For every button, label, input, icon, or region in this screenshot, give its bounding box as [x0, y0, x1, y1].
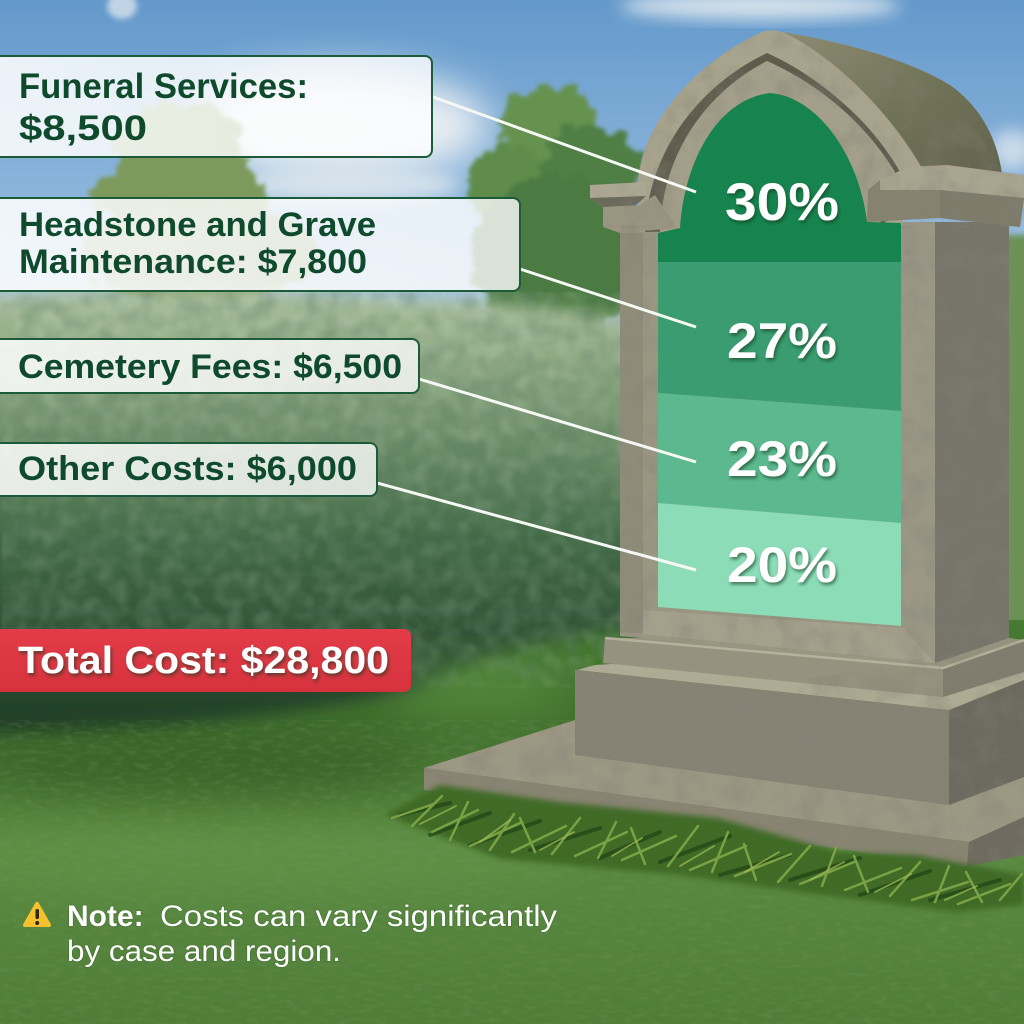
label: headstone and grave maintenance: Headstone and Grave [19, 206, 376, 244]
panel 20% [658, 503, 901, 626]
label: other costs: Other Costs: $6,000 [18, 450, 357, 488]
leader lines [377, 97, 696, 570]
stone arch [590, 30, 1024, 233]
note [25, 900, 565, 968]
panel 27% [658, 262, 901, 411]
left cornice [590, 182, 646, 207]
stone texture [654, 34, 1024, 228]
right cornice [867, 165, 1024, 227]
label: cemetery fees [0, 339, 419, 393]
panel 30% [658, 93, 901, 262]
label: headstone and grave maintenance [0, 198, 520, 291]
label: cemetery fees: Cemetery Fees: $6,500 [18, 348, 402, 386]
stone body [620, 222, 1009, 663]
note text: Costs can vary significantly [160, 900, 557, 933]
label: funeral services: Funeral Services: [19, 67, 308, 106]
tombstone [424, 28, 1024, 868]
icon: warning triangle [25, 904, 49, 925]
note text: Note: [67, 900, 144, 933]
label: funeral services: $8,500 [19, 109, 147, 148]
panel 23% [658, 393, 901, 523]
tree: left [80, 102, 320, 305]
label: headstone and grave maintenance: Maintenance: $7,800 [19, 243, 367, 281]
value 30%: 30% [725, 173, 839, 232]
stone plinth [424, 638, 1024, 867]
label: funeral services [0, 56, 432, 157]
total cost badge: Total Cost: $28,800 [18, 640, 389, 682]
tree: right [468, 85, 650, 335]
value 27%: 27% [727, 313, 837, 369]
grass tuft at stone base [385, 785, 1024, 912]
total cost badge [0, 629, 411, 692]
value 23%: 23% [727, 431, 837, 487]
value 20%: 20% [727, 537, 837, 593]
label: other costs [0, 443, 377, 496]
note text: by case and region. [67, 935, 341, 968]
